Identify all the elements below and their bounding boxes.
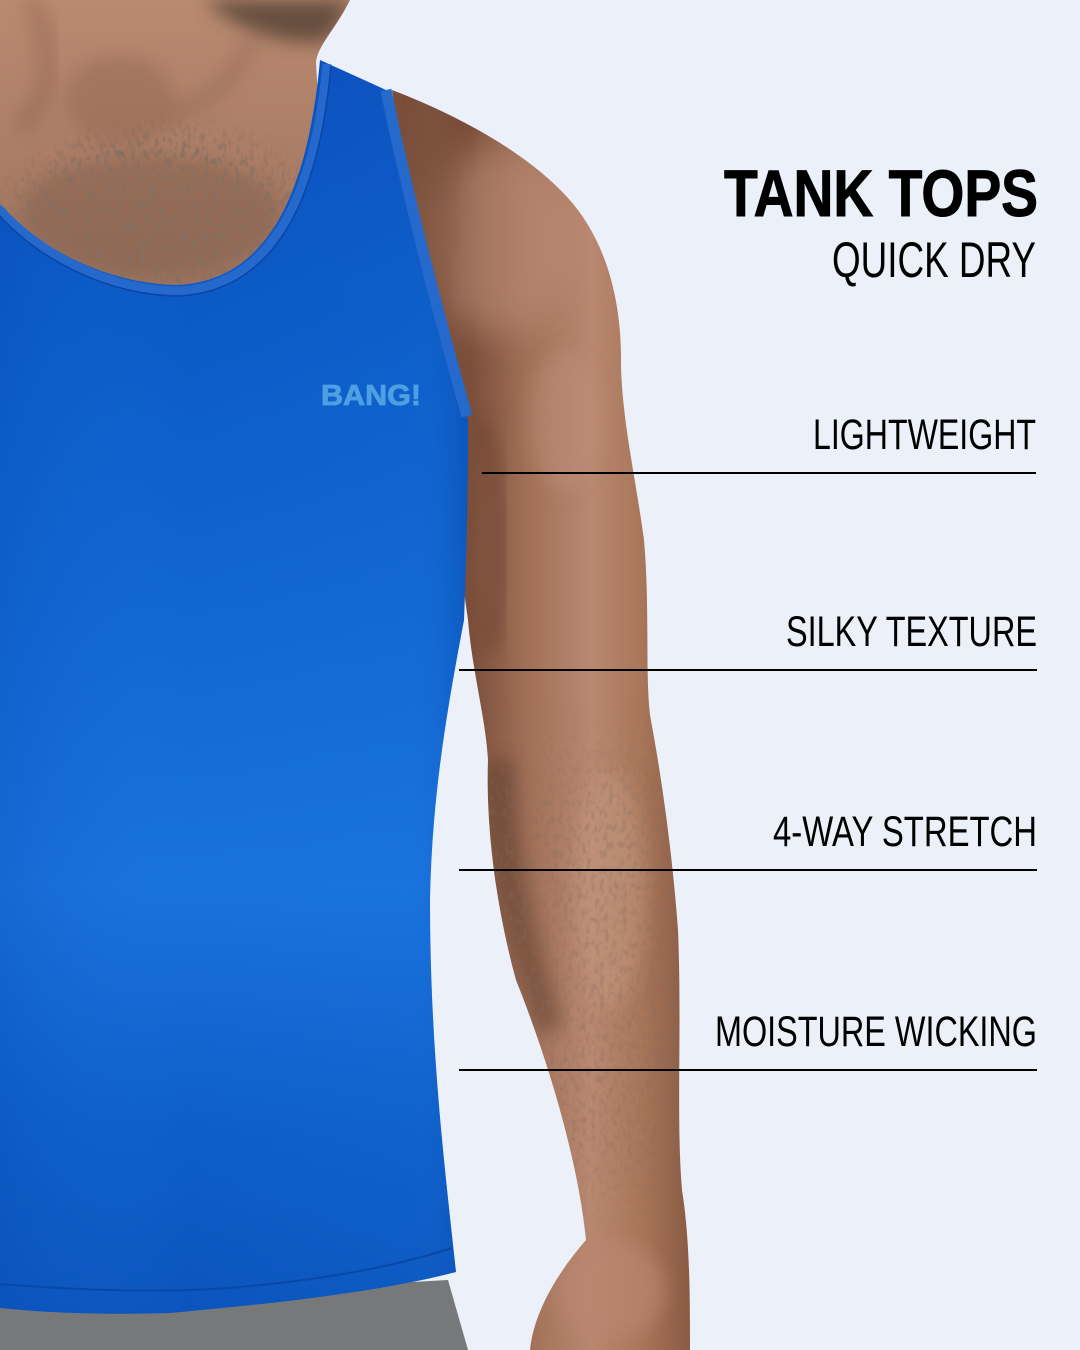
arm and shoulder <box>392 90 690 1350</box>
grey shorts <box>0 1280 468 1350</box>
neck and chest skin <box>0 0 350 285</box>
chest logo: BANG! <box>321 380 421 412</box>
photo: man wearing blue tank top <box>0 0 700 1350</box>
hem stitching <box>0 1248 452 1291</box>
blue tank top body <box>0 60 468 1314</box>
armhole binding <box>386 90 467 416</box>
neckline binding <box>0 64 327 291</box>
